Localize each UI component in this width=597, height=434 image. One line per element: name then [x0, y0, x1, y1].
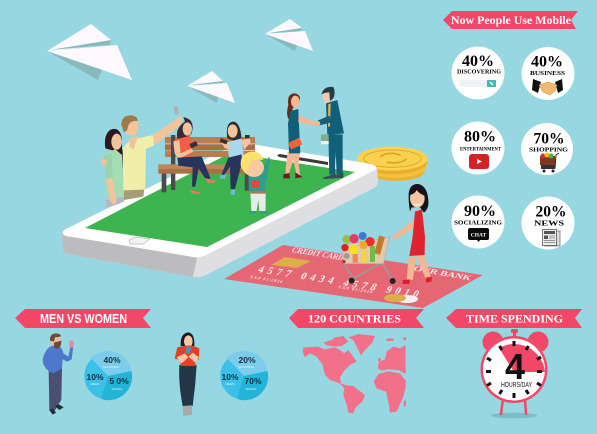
card: entertainment 80%: ENTERTAINMENT — [460, 146, 501, 152]
woman usage pie: 10% — [221, 372, 239, 382]
banner: TIME SPENDING: TIME SPENDING — [466, 312, 563, 326]
card text: CREDIT CARD — [290, 246, 346, 262]
icon: small paper plane — [265, 19, 313, 51]
man on left — [101, 106, 182, 200]
banner: 120 COUNTRIES: 120 COUNTRIES — [308, 312, 401, 326]
section: 120 countries — [289, 309, 424, 413]
woman usage pie: SHOPPING — [238, 365, 255, 369]
alarm clock: HOURS/DAY — [501, 382, 532, 389]
man usage pie — [84, 351, 132, 400]
card text: 4577 0434 4578 9010 — [256, 264, 422, 300]
chip — [271, 257, 311, 268]
businessman — [313, 87, 344, 178]
card text — [250, 246, 474, 300]
kid with book — [241, 152, 270, 214]
card: socializing 90%: CHAT — [471, 232, 487, 238]
woman in orange top — [173, 117, 215, 193]
man figure — [43, 333, 74, 415]
alarm clock — [480, 329, 548, 418]
card: news 20% — [522, 196, 574, 250]
card: discovering 40%: DISCOVERING — [457, 70, 501, 76]
banner: MEN VS WOMEN: MEN VS WOMEN — [40, 311, 127, 326]
card: business 40%: BUSINESS — [530, 71, 566, 77]
home button — [129, 237, 150, 244]
man usage pie: 40% — [103, 355, 121, 365]
banner: Now People Use Mobile: Now People Use Mobile — [451, 15, 571, 27]
card text: EXP 01/2020 — [338, 284, 374, 294]
gold coins — [357, 147, 428, 181]
phone side — [62, 168, 378, 277]
park bench — [158, 135, 255, 192]
section: time spending — [446, 309, 582, 418]
shopper woman with cart — [341, 184, 432, 284]
smartphone — [62, 143, 378, 277]
shopper — [392, 184, 432, 284]
world map — [303, 334, 406, 413]
section: men vs women — [15, 309, 268, 416]
phone screen — [85, 153, 355, 247]
card text: YOUR BANK — [404, 263, 474, 282]
card: shopping 70%: 70% — [534, 130, 564, 147]
paper planes — [47, 19, 313, 103]
icon: middle paper plane — [187, 71, 235, 103]
card: socializing 90%: SOCIALIZING — [454, 220, 502, 226]
section: how people use mobile — [443, 11, 578, 250]
man usage pie: SOCIAL — [111, 387, 123, 391]
woman usage pie: 20% — [238, 355, 256, 365]
alarm clock: 4 — [505, 346, 525, 387]
card: news 20%: NEWS — [534, 220, 564, 228]
credit card — [224, 245, 483, 308]
card: shopping 70% — [521, 123, 573, 175]
card: news 20%: 20% — [536, 204, 566, 221]
woman usage pie — [220, 351, 268, 400]
banner: MEN VS WOMEN — [15, 309, 151, 328]
banner: Now People Use Mobile — [443, 11, 578, 29]
icon: large paper plane — [47, 24, 132, 80]
card: business 40%: 40% — [531, 54, 563, 71]
woman usage pie: SOCIAL — [245, 387, 257, 391]
card: socializing 90% — [452, 196, 504, 248]
card: discovering 40%: 40% — [462, 53, 494, 70]
business people shaking hands — [283, 87, 344, 178]
shopping cart — [341, 232, 396, 284]
card: socializing 90%: 90% — [464, 203, 496, 220]
woman in blue shirt — [220, 122, 251, 195]
card: discovering 40% — [452, 46, 504, 100]
man usage pie: NEWS — [90, 382, 100, 386]
card logo — [384, 294, 418, 303]
woman usage pie: NEWS — [226, 382, 234, 386]
businesswoman — [283, 93, 315, 178]
man usage pie: 10% — [86, 372, 104, 382]
woman usage pie: 70% — [244, 376, 262, 386]
card: entertainment 80% — [452, 122, 504, 174]
people on the phone: couple taking selfie — [101, 106, 182, 208]
speaker — [277, 154, 328, 165]
card text: EXP 01/2020 — [250, 274, 284, 284]
woman on left — [104, 129, 129, 208]
seated women on bench — [173, 117, 251, 195]
card: business 40% — [522, 47, 574, 100]
card: shopping 70%: SHOPPING — [529, 148, 568, 154]
woman figure — [175, 332, 199, 416]
man usage pie: SHOPPING — [103, 365, 120, 369]
card: entertainment 80%: 80% — [464, 129, 496, 146]
man usage pie: 5 0% — [109, 376, 129, 386]
phone face — [62, 143, 376, 257]
